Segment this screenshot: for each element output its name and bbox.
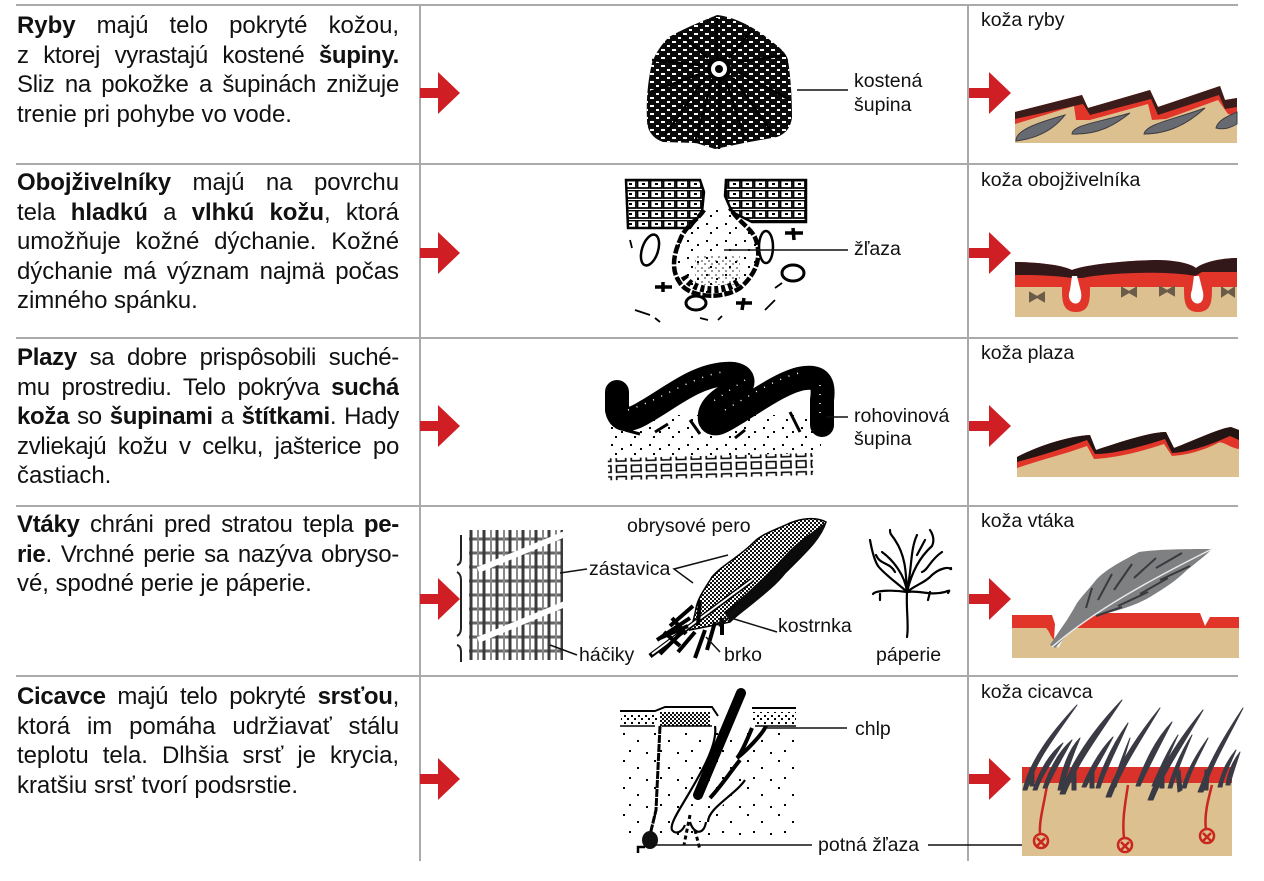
illustration: bony fish scale bbox=[645, 14, 795, 150]
label: obrysové pero: obrysové pero bbox=[627, 515, 751, 537]
sweat ducts and glands bbox=[1034, 785, 1214, 852]
leader: brko bbox=[706, 637, 720, 652]
skin: reptile bbox=[1017, 427, 1239, 477]
leader: rohovinová šupina bbox=[826, 416, 848, 418]
labels: right column skin titles: koža ryby bbox=[981, 9, 1065, 31]
label: rohovinová šupina: rohovinová bbox=[854, 405, 950, 427]
illustration: reptile horny scale bbox=[608, 372, 823, 480]
text block: Ryby: z ktorej vyrastajú kostené šupiny. bbox=[17, 42, 399, 68]
text block: Vtáky: rie. Vrchné perie sa nazýva obryso- bbox=[17, 540, 399, 568]
text block: Cicavce: ktorá im pomáha udržiavať stálu bbox=[17, 712, 399, 740]
illustration: feather barbs mesh bbox=[457, 530, 565, 662]
text block: Cicavce bbox=[17, 683, 399, 798]
label: háčiky: háčiky bbox=[579, 644, 635, 666]
leader: háčiky bbox=[550, 645, 577, 655]
labels: right column skin titles bbox=[981, 9, 1140, 703]
text block: Cicavce: teplotu tela. Dlhšia srsť je krycia, bbox=[17, 742, 399, 769]
skin: bird bbox=[1012, 549, 1239, 658]
arrows: middle column bbox=[420, 72, 460, 800]
label: kostená šupina: šupina bbox=[854, 94, 912, 116]
leader: potná žľaza bbox=[655, 844, 1025, 846]
text block: Plazy: Plazy sa dobre prispôsobili suché- bbox=[17, 344, 399, 371]
text block: Obojživelníky: tela hladkú a vlhkú kožu, ktorá bbox=[17, 198, 399, 226]
arrows: right column bbox=[969, 72, 1011, 800]
skin: fish bbox=[1015, 86, 1237, 143]
label: zástavica: zástavica bbox=[589, 558, 670, 580]
text block: Obojživelníky bbox=[17, 169, 399, 314]
labels: right column skin titles: koža plaza bbox=[981, 342, 1074, 364]
text block: Plazy: koža so šupinami a štítkami. Hady bbox=[17, 403, 399, 430]
text block: Ryby: trenie pri pohybe vo vode. bbox=[17, 100, 292, 128]
skin: amphibian bbox=[1015, 258, 1237, 317]
illustration: down feather bbox=[870, 530, 951, 637]
leader: zástavica bbox=[560, 555, 728, 583]
text block: Plazy bbox=[17, 344, 399, 489]
text block: Vtáky: Vtáky chráni pred stratou tepla pe- bbox=[17, 511, 399, 538]
label: kostená šupina: kostená bbox=[854, 70, 922, 92]
text block: Ryby: Sliz na pokožke a šupinách znižuje bbox=[17, 71, 399, 98]
text block: Vtáky bbox=[17, 511, 399, 597]
text block: Cicavce: Cicavce majú telo pokryté srsťou, bbox=[17, 683, 399, 710]
text block: Obojživelníky: Obojživelníky majú na povrchu bbox=[17, 169, 399, 196]
text block: Cicavce: kratšiu srsť tvorí podsrstie. bbox=[17, 772, 298, 798]
text block: Plazy: častiach. bbox=[17, 462, 111, 489]
text block: Plazy: mu prostrediu. Telo pokrýva suchá bbox=[17, 374, 399, 400]
hairs: mammal skin bbox=[1023, 700, 1243, 800]
leader: kostrnka bbox=[731, 618, 777, 632]
text block: Ryby: Ryby majú telo pokryté kožou, bbox=[17, 12, 399, 39]
leader: chlp bbox=[766, 727, 847, 729]
label: brko: brko bbox=[724, 644, 762, 666]
illustration: contour feather bbox=[650, 519, 826, 658]
labels: right column skin titles: koža obojživelníka bbox=[981, 169, 1140, 191]
label: chlp: chlp bbox=[855, 718, 891, 740]
label: páperie: páperie bbox=[876, 644, 941, 666]
leader: kostená šupina bbox=[797, 89, 848, 91]
illustration: mammal hair follicle bbox=[620, 693, 796, 853]
text block: Obojživelníky: zimného spánku. bbox=[17, 287, 198, 314]
text block: Ryby bbox=[17, 12, 399, 128]
label: potná žľaza: potná žľaza bbox=[818, 834, 919, 856]
skin: mammal bbox=[1022, 767, 1232, 856]
illustration: amphibian gland bbox=[626, 180, 806, 322]
label: kostená šupina bbox=[854, 70, 922, 116]
labels: right column skin titles: koža cicavca bbox=[981, 681, 1093, 703]
text block: Plazy: zvliekajú kožu v celku, jašterice po bbox=[17, 432, 399, 460]
text block: Vtáky: vé, spodné perie je páperie. bbox=[17, 570, 312, 597]
text block: Obojživelníky: umožňuje kožné dýchanie. Kožné bbox=[17, 228, 399, 255]
label: kostrnka: kostrnka bbox=[778, 615, 852, 637]
label: rohovinová šupina bbox=[854, 405, 950, 450]
leader: žľaza bbox=[724, 249, 848, 251]
label: rohovinová šupina: šupina bbox=[854, 428, 912, 450]
label: žľaza: žľaza bbox=[854, 238, 901, 260]
labels: right column skin titles: koža vtáka bbox=[981, 510, 1074, 532]
text block: Obojživelníky: dýchanie má význam najmä počas bbox=[17, 258, 399, 284]
